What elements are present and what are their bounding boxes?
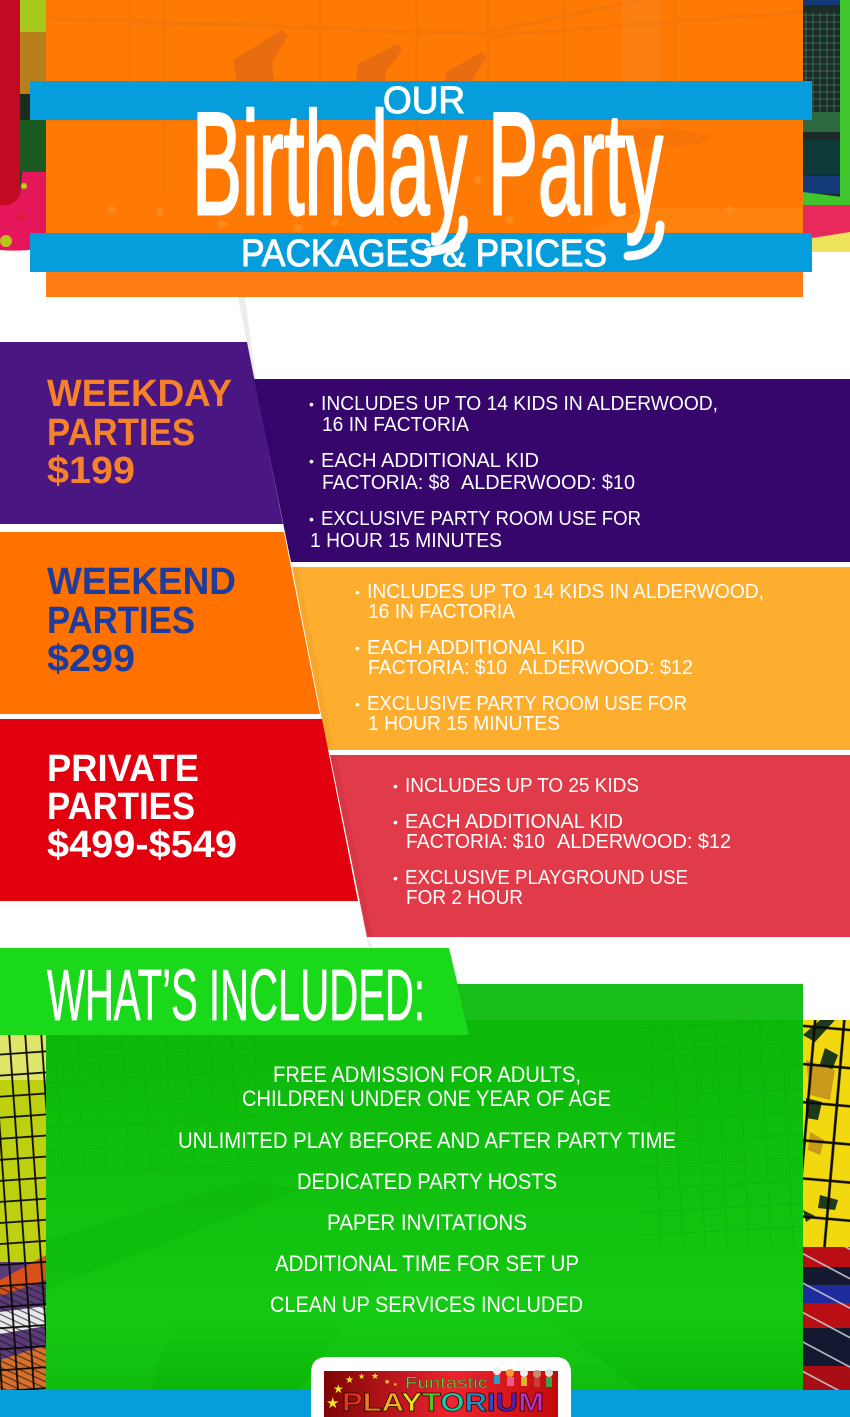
panel: private parties: • xyxy=(393,814,398,830)
panel: private parties: FACTORIA: $10 xyxy=(406,831,545,853)
logo: Funtastic Playtorium: Funtastic xyxy=(405,1375,488,1392)
panel: private parties: PARTIES xyxy=(47,786,195,828)
panel: weekend parties: • xyxy=(355,584,360,600)
included list xyxy=(178,1062,676,1317)
panel: weekday parties: $199 xyxy=(47,450,135,492)
logo: Funtastic Playtorium xyxy=(311,1357,571,1417)
panel: weekday parties xyxy=(0,342,850,562)
top photo: left strip xyxy=(0,0,46,251)
panel: weekend parties: 1 HOUR 15 MINUTES xyxy=(368,713,560,735)
panel: weekday parties: 1 HOUR 15 MINUTES xyxy=(310,530,502,552)
logo: Funtastic Playtorium: ★ xyxy=(345,1375,354,1386)
panel: weekday parties: EXCLUSIVE PARTY ROOM USE FOR xyxy=(321,508,641,530)
included list: ADDITIONAL TIME FOR SET UP xyxy=(275,1251,579,1276)
panel: weekday parties: INCLUDES UP TO 14 KIDS IN ALDERWOOD, xyxy=(321,393,718,415)
panel: private parties: FOR 2 HOUR xyxy=(406,887,523,909)
title xyxy=(192,80,663,275)
panel: weekday parties: • xyxy=(309,396,314,412)
panel: weekday parties: PARTIES xyxy=(47,412,195,454)
panel: private parties: EACH ADDITIONAL KID xyxy=(405,811,623,833)
what's included banner: WHAT’S INCLUDED: xyxy=(47,956,425,1036)
panel: weekday parties: EACH ADDITIONAL KID xyxy=(321,450,539,472)
panel: weekend parties: EACH ADDITIONAL KID xyxy=(367,637,585,659)
panel: weekday parties: WEEKDAY xyxy=(47,373,232,415)
panel: weekday parties: ALDERWOOD: $10 xyxy=(461,472,635,494)
panel: weekend parties: INCLUDES UP TO 14 KIDS IN ALDERWOOD, xyxy=(367,581,764,603)
logo: Funtastic Playtorium: ★ xyxy=(384,1378,390,1386)
bottom photo: right strip xyxy=(803,1020,850,1390)
panel: weekend parties: • xyxy=(355,640,360,656)
panel: private parties xyxy=(0,719,850,937)
bottom photo: left strip xyxy=(0,1020,46,1390)
what's included banner xyxy=(0,948,470,1036)
included list: DEDICATED PARTY HOSTS xyxy=(297,1169,557,1194)
panel: private parties: PRIVATE xyxy=(47,748,199,790)
panel: private parties: EXCLUSIVE PLAYGROUND USE xyxy=(405,867,688,889)
panel: private parties: $499-$549 xyxy=(47,824,237,866)
included list: PAPER INVITATIONS xyxy=(327,1210,527,1235)
panel: private parties: • xyxy=(393,870,398,886)
logo: Funtastic Playtorium: ★ xyxy=(371,1371,379,1381)
green included panel xyxy=(46,984,803,1390)
panel: weekend parties: 16 IN FACTORIA xyxy=(368,601,516,623)
panel: weekend parties: $299 xyxy=(47,638,135,680)
panel: weekend parties: FACTORIA: $10 xyxy=(368,657,507,679)
panel: private parties: • xyxy=(393,778,398,794)
panel: weekend parties: ALDERWOOD: $12 xyxy=(519,657,693,679)
included list: CLEAN UP SERVICES INCLUDED xyxy=(270,1292,583,1317)
logo: Funtastic Playtorium: ★ xyxy=(326,1395,339,1412)
blue footer xyxy=(0,1390,850,1417)
blue bar: bottom xyxy=(30,233,812,272)
title: PACKAGES & PRICES xyxy=(241,233,607,275)
panel: weekend parties: WEEKEND xyxy=(47,561,236,603)
panel: private parties: INCLUDES UP TO 25 KIDS xyxy=(405,775,639,797)
orange header panel xyxy=(46,0,803,297)
panel: weekday parties: • xyxy=(309,511,314,527)
panel: private parties: ALDERWOOD: $12 xyxy=(557,831,731,853)
panel: weekday parties: • xyxy=(309,453,314,469)
panel: weekend parties: • xyxy=(355,696,360,712)
logo: Funtastic Playtorium: ★ xyxy=(358,1372,365,1381)
blue bar: top xyxy=(30,81,812,120)
fold shadows xyxy=(238,297,460,984)
logo: Funtastic Playtorium: PLAYTORIUM xyxy=(342,1387,544,1417)
included list: CHILDREN UNDER ONE YEAR OF AGE xyxy=(242,1086,611,1111)
title: OUR xyxy=(383,80,465,122)
included list: UNLIMITED PLAY BEFORE AND AFTER PARTY TIME xyxy=(178,1128,676,1153)
panel: weekend parties xyxy=(0,532,850,750)
panel: weekend parties: PARTIES xyxy=(47,600,195,642)
panel: weekday parties: 16 IN FACTORIA xyxy=(322,414,470,436)
panel: weekend parties: EXCLUSIVE PARTY ROOM USE FOR xyxy=(367,693,687,715)
logo: Funtastic Playtorium: ★ xyxy=(393,1382,398,1388)
panel: weekday parties: FACTORIA: $8 xyxy=(322,472,450,494)
logo: Funtastic Playtorium: ★ xyxy=(333,1382,344,1396)
top photo: right strip xyxy=(803,0,850,252)
included list: FREE ADMISSION FOR ADULTS, xyxy=(273,1062,581,1087)
